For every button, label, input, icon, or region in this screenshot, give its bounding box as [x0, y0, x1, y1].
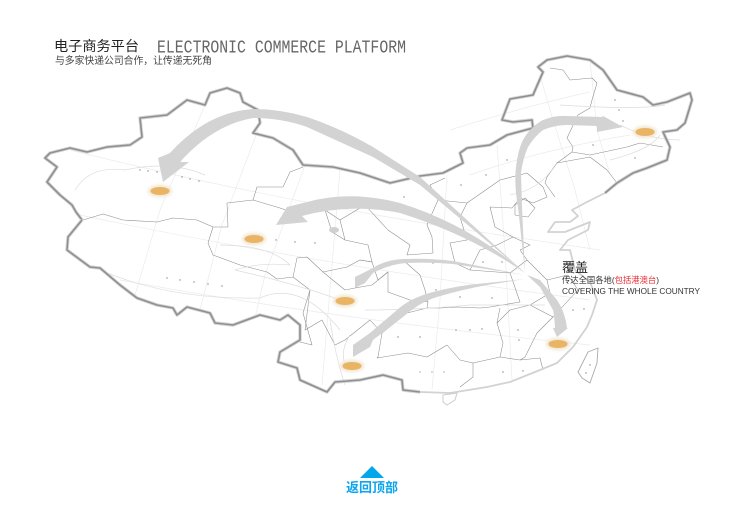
- Taiwan island: [578, 348, 598, 383]
- arrow: to Heilongjiang: [515, 116, 623, 272]
- callout English line: COVERING THE WHOLE COUNTRY: [562, 286, 700, 296]
- arrows from the east hub: [158, 109, 623, 357]
- marker: Fujian: [546, 338, 570, 350]
- callout Chinese line: 传达全国各地(包括港澳台): [562, 275, 659, 285]
- city dots: [139, 99, 636, 374]
- back to top: [346, 466, 398, 495]
- arrow: to Qinghai: [276, 196, 525, 273]
- marker: Heilongjiang: [633, 126, 657, 138]
- marker: Xinjiang: [148, 185, 172, 197]
- coverage callout: [562, 260, 700, 296]
- graticule lines: [70, 60, 630, 390]
- destination markers: [148, 126, 657, 372]
- marker: Yunnan: [340, 360, 364, 372]
- title block: [54, 38, 406, 67]
- Hainan island: [443, 393, 457, 405]
- rivers and lakes: [75, 105, 680, 385]
- arrow: to Xinjiang: [158, 109, 525, 273]
- heading: Chinese: 电子商务平台: [54, 38, 139, 54]
- province boundaries: [83, 68, 663, 387]
- national border: [45, 56, 692, 220]
- China map: [45, 56, 692, 405]
- coastline: [420, 193, 605, 393]
- arrow: to Fujian: [527, 275, 568, 337]
- callout heading: 覆盖: [562, 260, 588, 275]
- arrow: to Yunnan: [353, 279, 525, 357]
- marker: Sichuan: [333, 295, 357, 307]
- icon: up triangle: [360, 466, 384, 478]
- arrow: to Sichuan: [355, 259, 525, 288]
- back to top label: 返回顶部: [346, 480, 398, 495]
- heading: English: ELECTRONIC COMMERCE PLATFORM: [157, 38, 406, 58]
- subtitle: 与多家快递公司合作，让传递无死角: [55, 54, 212, 67]
- marker: Qinghai: [242, 233, 266, 245]
